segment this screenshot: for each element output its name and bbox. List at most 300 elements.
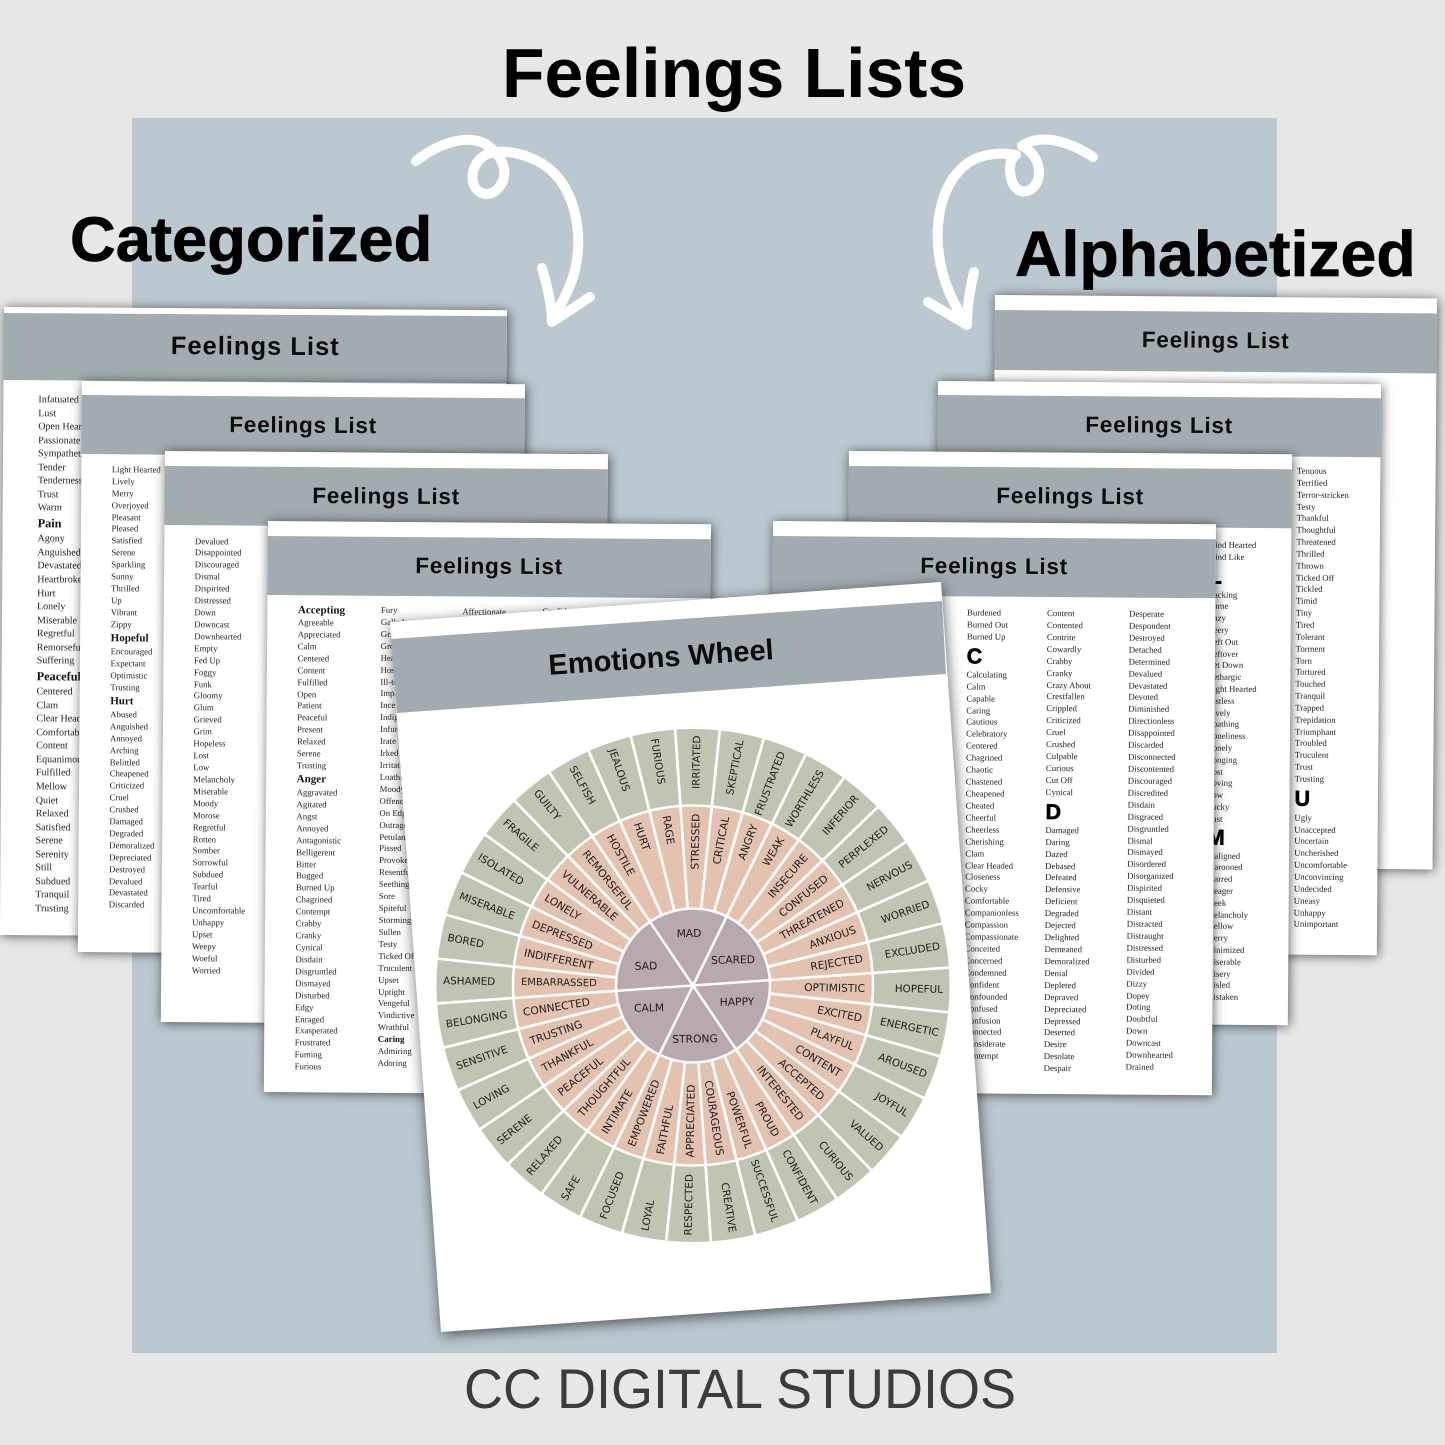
page header <box>4 313 507 383</box>
word list: Hurt <box>110 695 134 707</box>
word list: Passionate <box>38 435 80 446</box>
word list: Sympathetic <box>38 448 88 460</box>
word list column 1: Compassion <box>965 920 1008 930</box>
word list: Lively <box>1208 707 1231 717</box>
word list: Tranquil <box>35 890 69 901</box>
word list: Clam <box>36 700 58 711</box>
word list column 2: Admiring <box>378 1046 412 1056</box>
word list: Vibrant <box>111 607 137 617</box>
word list: Overjoyed <box>112 500 149 510</box>
word list column 2: Grim <box>381 629 399 639</box>
word list: Funk <box>194 679 212 689</box>
word list column 2: Cut Off <box>1046 775 1073 785</box>
page header <box>937 395 1381 457</box>
word list: Lucky <box>1207 802 1229 812</box>
word list column 2: Upset <box>378 974 399 985</box>
word list column 2: Depressed <box>1044 1016 1081 1026</box>
word list: Cruel <box>110 792 129 803</box>
word list column 2: Culpable <box>1046 751 1078 761</box>
core emotion labels: HAPPY <box>720 995 755 1009</box>
word list column 1: Comfortable <box>965 896 1009 906</box>
word list column 2: Ill-tempered <box>380 676 424 687</box>
word list: Annoyed <box>110 733 142 743</box>
word list: Remorseful <box>37 642 83 653</box>
word list column 3: Discouraged <box>1128 776 1172 786</box>
panel: categorized page 2 <box>78 381 525 955</box>
word list column 2: Depreciated <box>1044 1004 1086 1014</box>
word list column 3: Disordered <box>1127 859 1166 869</box>
word list: Infatuated <box>38 394 79 405</box>
middle ring labels: PEACEFUL <box>555 1054 606 1099</box>
word list: Crushed <box>109 804 139 815</box>
word list column 1: Connected <box>964 1027 1001 1037</box>
word list: Trusting <box>35 903 69 914</box>
word list: Content <box>36 741 68 752</box>
page sheet <box>390 582 991 1332</box>
word list column 2: Depraved <box>1044 992 1078 1002</box>
middle ring labels: PLAYFUL <box>809 1025 856 1053</box>
word list: Lively <box>112 476 135 486</box>
word list column 1: Calm <box>298 641 317 651</box>
word list column 1: Open <box>297 689 316 699</box>
middle ring labels: CONTENT <box>793 1042 844 1080</box>
word list: Touched <box>1295 679 1325 689</box>
word list column 1: Burned Up <box>296 883 335 893</box>
word list: Peaceful <box>37 669 81 683</box>
word list column 2: Crestfallen <box>1046 691 1085 702</box>
word list: Left Out <box>1208 636 1238 647</box>
core emotion labels <box>634 927 755 1046</box>
outer ring labels <box>443 735 943 1236</box>
word list: Tired <box>1296 620 1315 630</box>
word list: Disappointed <box>195 548 242 558</box>
word list: Merry <box>1206 933 1228 943</box>
outer ring labels: LOVING <box>471 1082 512 1112</box>
word list: Discouraged <box>195 560 239 570</box>
word list: Demoralized <box>109 840 154 850</box>
word list: Torment <box>1296 643 1325 654</box>
word list: Hopeful <box>111 633 149 645</box>
word list column 1: Chaotic <box>966 765 993 775</box>
word list column 3: Downhearted <box>1126 1050 1173 1060</box>
word list: L <box>1209 564 1222 588</box>
word list: Tolerant <box>1296 631 1325 642</box>
outer ring labels: SENSITIVE <box>455 1044 509 1073</box>
middle ring labels: INTIMATE <box>599 1087 636 1136</box>
outer ring labels: CONFIDENT <box>779 1148 820 1208</box>
word list: Distressed <box>194 595 231 606</box>
word list: Subdued <box>35 876 70 887</box>
word list column 3: Devastated <box>1128 680 1167 690</box>
outer ring labels: ISOLATED <box>476 852 526 888</box>
word list: Criticized <box>110 781 144 791</box>
word list: Upset <box>192 929 213 939</box>
outer ring labels: JOYFUL <box>872 1090 911 1120</box>
word list: Minimized <box>1206 945 1244 955</box>
word list: Down <box>194 607 216 617</box>
word list: Pleased <box>111 524 138 534</box>
outer ring labels: VALUED <box>847 1118 886 1154</box>
word list: Kind Like Lacking <box>1209 551 1245 599</box>
word list column 1: Fulfilled <box>297 677 328 687</box>
word list: Unimportant <box>1294 919 1338 929</box>
middle ring labels: WEAK <box>760 834 788 869</box>
word list: Loving <box>1207 778 1232 788</box>
middle ring labels: INTERESTED <box>754 1063 806 1123</box>
word list column 1: Concerned <box>964 955 1002 966</box>
word list: Dispirited <box>195 583 230 594</box>
word list column 1: Dismayed <box>295 978 331 988</box>
word list column 2 <box>1044 608 1091 1073</box>
word list column 3: Doubtful <box>1126 1014 1158 1024</box>
word list column 1: Calm <box>966 681 985 691</box>
word list: Thrilled <box>1296 549 1325 559</box>
word list <box>1206 540 1257 1002</box>
word list column 3: Distraught <box>1127 930 1164 941</box>
word list column 3: Downcast <box>1126 1038 1161 1048</box>
word list column 2: Crabby <box>1047 656 1072 666</box>
word list: Tortured <box>1295 667 1326 677</box>
footer brand: CC DIGITAL STUDIOS <box>464 1357 1016 1420</box>
word list: Satisfied <box>111 536 142 546</box>
middle ring labels: THANKFUL <box>539 1036 595 1075</box>
word list: Mellow <box>36 781 67 792</box>
word list column 4: Confident <box>542 606 577 616</box>
middle ring labels: LONELY <box>542 891 583 923</box>
word list column 3: Devoted <box>1128 692 1158 702</box>
word list: Unhappy <box>1294 907 1326 917</box>
word list: Miserable <box>1206 956 1241 967</box>
word list column 2: Adoring <box>378 1058 407 1068</box>
word list column 1: Edgy <box>295 1002 314 1012</box>
word list: U <box>1294 786 1310 811</box>
word list column 1: Cheated <box>966 800 994 811</box>
word list: Suffering Centered <box>36 655 74 698</box>
word list: Downcast <box>194 619 229 629</box>
word list: M <box>1207 825 1225 849</box>
page header band <box>391 601 946 713</box>
word list column 3: Divided <box>1126 966 1155 976</box>
word list: Relaxed <box>36 808 69 820</box>
word list column 2: Sore <box>379 891 395 901</box>
middle ring labels: HOSTILE <box>604 832 638 878</box>
word list column 3: Distracted <box>1127 919 1163 929</box>
word list column 3: Disturbed <box>1126 954 1161 965</box>
page header <box>772 536 1216 598</box>
core emotion labels: STRONG <box>672 1032 718 1046</box>
word list column 2: Caring <box>378 1034 404 1044</box>
word list column 2: Demoralized <box>1044 956 1090 966</box>
word list: Longing <box>1207 754 1237 765</box>
middle ring labels: COURAGEOUS <box>702 1079 726 1157</box>
word list: Lost <box>193 750 209 760</box>
word list column 2: Depleted <box>1044 980 1076 990</box>
word list: Misled <box>1206 980 1230 990</box>
word list: Serenity <box>35 849 69 860</box>
word list column 2: Dejected <box>1045 920 1076 930</box>
word list: Destroyed <box>109 864 145 874</box>
word list: Dismal <box>195 571 220 582</box>
word list: Degraded <box>109 828 143 838</box>
middle ring labels: REMORSEFUL <box>580 848 636 912</box>
word list column 2: Defensive <box>1045 884 1081 895</box>
word list: Troubled <box>1295 738 1327 748</box>
word list: Devastated <box>109 888 148 898</box>
word list: Devalued <box>109 876 142 886</box>
word list column 3: Despondent <box>1129 621 1171 631</box>
middle ring labels: VULNERABLE <box>559 868 621 924</box>
middle ring labels: POWERFUL <box>723 1090 755 1150</box>
middle ring labels: PROUD <box>752 1099 782 1139</box>
word list column 2: Uptight <box>378 986 405 997</box>
word list column 1: Relaxed <box>297 736 326 747</box>
word list column 2: Crazy About <box>1046 680 1091 690</box>
word list column 1: Bugged <box>296 871 323 881</box>
word list column 3: Disquieted <box>1127 895 1165 905</box>
word list column 1: Appreciated <box>298 629 341 639</box>
outer ring labels: EXCLUDED <box>884 940 941 961</box>
outer ring labels: ASHAMED <box>443 975 495 988</box>
word list column 2: Indignant <box>380 712 414 722</box>
word list column 1: Clear Headed <box>965 860 1013 870</box>
word list: Lust Maligned <box>1207 813 1240 860</box>
word list column 3: Drained <box>1126 1062 1154 1072</box>
outer ring labels: RELAXED <box>524 1134 565 1178</box>
word list: Trust <box>1295 762 1313 772</box>
word list: Meager <box>1206 886 1233 896</box>
word list column 1: Trusting Aggravated <box>297 760 337 798</box>
word list column 1: Present <box>297 725 323 735</box>
word list: Expectant <box>110 659 146 669</box>
word list column 2: Debased <box>1045 861 1075 871</box>
word list column 2: Resentful <box>379 867 413 877</box>
word list: Gloomy <box>194 691 223 701</box>
word list: Tearful <box>192 881 218 892</box>
word list: Trepidation <box>1295 714 1336 725</box>
middle ring <box>513 806 873 1166</box>
word list: Marooned <box>1207 862 1243 872</box>
word list column 1: C <box>967 644 982 668</box>
word list: Trust <box>38 489 59 500</box>
word list column 3: Dismayed <box>1127 847 1163 857</box>
word list: Threatened <box>1296 537 1336 547</box>
word list: Leftover <box>1208 648 1238 658</box>
word list: Weepy <box>192 941 216 951</box>
word list column 1: Cheapened <box>966 788 1005 799</box>
word list: Heartbroken <box>37 574 87 586</box>
word list column 1: Confused <box>964 1003 998 1013</box>
word list column 3: Devalued <box>1129 668 1162 678</box>
word list column 1: Considerate <box>964 1039 1006 1049</box>
word list: Thankful <box>1297 513 1329 523</box>
word list: Triumphant <box>1295 726 1336 736</box>
outer ring labels: CURIOUS <box>816 1139 855 1184</box>
word list: Loathing <box>1208 719 1239 729</box>
word list column 2: Pissed <box>379 843 402 853</box>
outer ring labels: SERENE <box>495 1112 535 1147</box>
word list <box>192 536 245 975</box>
middle ring labels: FAITHFUL <box>654 1104 676 1156</box>
word list: Tenuous <box>1297 466 1327 476</box>
word list column 3: Dismal <box>1127 835 1153 845</box>
middle ring labels: APPRECIATED <box>683 1084 698 1158</box>
outer ring labels: INFERIOR <box>820 793 862 838</box>
outer ring labels: SKEPTICAL <box>724 739 747 796</box>
word list column 2: Cynical Damaged <box>1045 787 1079 835</box>
word list: Serene <box>36 835 63 847</box>
word list: Grim <box>194 726 212 737</box>
page header: Feelings List <box>229 412 377 438</box>
outer ring labels: SELFISH <box>567 764 598 807</box>
emotions wheel chart <box>436 728 950 1243</box>
outer ring labels: AROUSED <box>876 1051 929 1081</box>
word list: Comfortable <box>36 727 87 738</box>
word list column 1: Compassionate <box>965 931 1018 942</box>
page header: Feelings List <box>1142 327 1290 353</box>
word list column 2: Ticked Off <box>378 951 417 961</box>
word list: Truculent <box>1295 750 1329 760</box>
word list: Let Down <box>1208 660 1243 670</box>
word list: Trapped <box>1295 703 1324 713</box>
word list: Tenderness <box>38 476 83 487</box>
outer ring labels: FRUSTRATED <box>753 750 788 818</box>
word list column 2: Dazed <box>1045 849 1068 859</box>
word list: Mellow <box>1206 921 1233 931</box>
outer ring labels: JEALOUS <box>606 746 632 794</box>
outer ring labels: ENERGETIC <box>879 1016 940 1039</box>
core emotion labels: SAD <box>635 959 657 973</box>
page header <box>81 395 525 457</box>
word list column 3 <box>1126 609 1176 1072</box>
word list column 1: Confident <box>964 979 999 989</box>
outer ring labels: FRAGILE <box>500 817 541 854</box>
outer ring labels: GUILTY <box>531 787 563 823</box>
word list: Loneliness <box>1207 731 1245 741</box>
word list column 1: Serene <box>297 748 321 759</box>
word list: Up <box>111 595 122 605</box>
word list column 1: Bitter <box>296 859 316 869</box>
word list: Listless <box>1208 695 1235 706</box>
outer ring labels: LOYAL <box>639 1199 657 1232</box>
word list: Miserable <box>193 786 228 796</box>
middle ring labels: RAGE <box>660 815 677 846</box>
page header: Feelings List <box>920 553 1068 579</box>
word list column 2: Offended <box>380 796 412 806</box>
word list: Lost <box>1207 766 1223 776</box>
word list: Somber <box>193 846 220 856</box>
word list column 3: Disdain <box>1128 799 1155 810</box>
word list column 2: Cruel <box>1046 727 1066 737</box>
word list: Fed Up <box>194 655 220 665</box>
outer ring labels: RESPECTED <box>683 1174 696 1236</box>
word list column 2: Irked <box>380 748 398 758</box>
word list: Merry <box>112 488 134 498</box>
word list column 1: Burned Up Calculating <box>967 631 1007 679</box>
word list: Thrilled <box>111 583 139 593</box>
word list: Depreciated <box>109 852 151 862</box>
word list column 3: Distressed <box>1127 942 1163 953</box>
word list: Mistaken <box>1206 992 1238 1002</box>
word list: Leery <box>1208 625 1229 635</box>
page header: Feelings List <box>171 332 340 361</box>
word list: Low <box>1207 790 1223 800</box>
word list: Anguished <box>110 721 148 731</box>
middle ring labels <box>521 813 865 1158</box>
word list column 2: Despair <box>1044 1063 1071 1073</box>
word list column 1 <box>964 607 1019 1061</box>
word list column 1: Crabby <box>296 918 321 929</box>
word list: Lust <box>38 408 56 419</box>
outer ring labels: FURIOUS <box>648 738 667 786</box>
word list column 1: Agreeable <box>298 617 334 627</box>
word list column 1: Closeness <box>965 872 1000 882</box>
word list: Uncherished <box>1294 848 1338 858</box>
word list: Discarded <box>109 899 144 910</box>
outer ring labels: WORTHLESS <box>783 768 827 830</box>
word list column 1 <box>294 604 345 1072</box>
word list column 1: Content <box>297 665 325 675</box>
word list: Optimistic <box>110 670 147 681</box>
word list: Lonely <box>37 601 65 612</box>
word list: Regretful <box>37 628 75 640</box>
word list: Equanimous <box>36 754 86 765</box>
word list column 1: Confounded <box>964 991 1008 1001</box>
outer ring labels: MISERABLE <box>457 890 516 923</box>
word list column 1: Capable <box>966 693 995 703</box>
word list column 1: Centered <box>298 653 329 663</box>
page title: Emotions Wheel <box>547 634 775 682</box>
word list column 3: Destroyed <box>1129 632 1165 643</box>
word list column 3: Desperate <box>1129 609 1164 619</box>
panel: alphabetized page 3 <box>845 451 1292 1025</box>
word list: Lonely <box>1207 743 1232 753</box>
word list column 1: Caring <box>966 705 990 715</box>
word list column 2: Defeated <box>1045 872 1077 883</box>
middle ring labels: INDIFFERENT <box>523 946 595 973</box>
page header <box>848 466 1292 528</box>
word list: Quiet <box>36 795 58 806</box>
panel: categorized page 1 <box>0 307 507 938</box>
panel: categorized page 4 <box>264 521 711 1095</box>
arrow: right curl <box>928 140 1093 325</box>
panel: alphabetized page 1 <box>991 295 1437 869</box>
page header: Feelings List <box>996 483 1144 509</box>
word list column 3: Distant <box>1127 907 1152 917</box>
word list column 2: Moody <box>380 784 405 794</box>
word list: Tired <box>192 893 211 904</box>
word list column 2: Desolate <box>1044 1051 1074 1061</box>
word list column 1: Condemned <box>964 967 1007 978</box>
middle ring labels: DEPRESSED <box>530 918 595 953</box>
outer ring <box>436 729 950 1242</box>
word list column 2: Curious <box>1046 763 1074 773</box>
word list column 1: Contempt <box>964 1051 998 1061</box>
page header: Feelings List <box>1085 412 1233 438</box>
word list column 3: Discarded <box>1128 740 1164 750</box>
middle ring labels: REJECTED <box>809 952 864 973</box>
word list column 2: Irritated <box>380 760 408 770</box>
word list: Undecided <box>1294 883 1332 894</box>
word list column 3: Disconnected <box>1128 752 1176 762</box>
word list: Anguished <box>37 547 81 558</box>
word list: Uncertain <box>1294 836 1329 846</box>
word list: Lethargic <box>1208 672 1241 682</box>
word list: Hurt <box>37 588 56 599</box>
word list column 1: Cynical <box>295 942 323 952</box>
word list column 2: Degraded <box>1045 908 1079 918</box>
word list column 1: Exasperated <box>295 1026 338 1036</box>
word list column 3: Determined <box>1129 656 1170 667</box>
